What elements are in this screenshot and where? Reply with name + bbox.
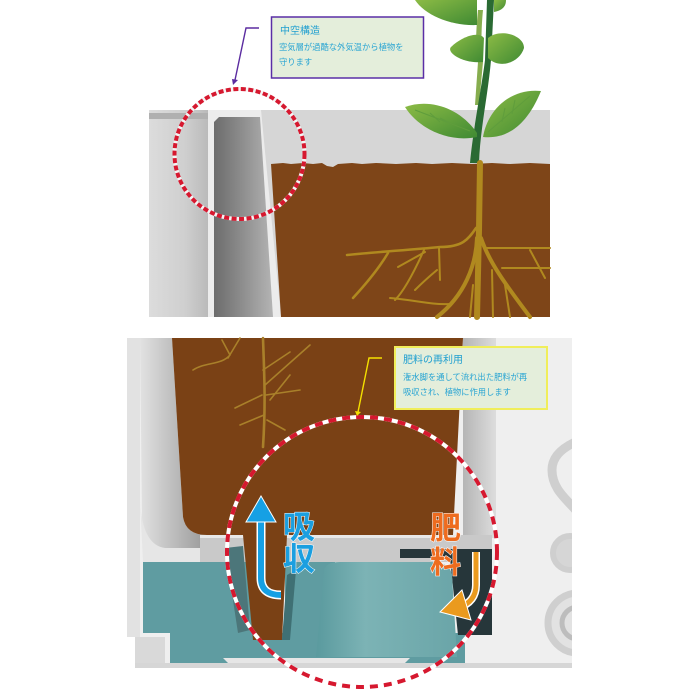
arrow: absorption up [246,496,281,595]
dashed highlight circle [227,417,497,687]
dark reservoir corner [400,549,492,635]
panel: fertilizer reuse cross-section [127,338,608,687]
arrow: to fertilizer reuse [355,358,382,416]
dashed highlight circle [174,89,304,219]
soil body [172,338,463,640]
label: fertilizer: 肥 [430,511,461,546]
panel: hollow structure cross-section [149,0,550,317]
callout: hollow structure: 守ります [279,57,312,67]
callout: hollow structure: 空気層が過酷な外気温から植物を [279,42,403,52]
arrow: fertilizer down [440,552,476,620]
reservoir water [143,546,465,663]
roots [347,163,550,317]
callout: fertilizer reuse: 吸収され、植物に作用します [403,387,511,397]
callout: hollow structure [272,17,424,78]
hollow air cavity [214,117,273,317]
label: absorption: 吸 [283,509,315,545]
water cup [316,562,457,657]
label: absorption: 収 [283,541,315,577]
planter body [127,338,572,668]
callout: fertilizer reuse [395,347,547,409]
upper faint roots [193,338,310,447]
plant leaves and stem [405,0,541,163]
arrow: to hollow structure [232,28,259,85]
label: fertilizer: 料 [430,545,461,580]
soil [271,163,550,317]
planter wall [149,110,550,317]
right side knobs [544,438,572,656]
callout: fertilizer reuse: 潅水脚を通して流れ出た肥料が再 [403,372,527,382]
label: absorption [283,509,315,577]
label: fertilizer [430,511,461,580]
callout: fertilizer reuse: 肥料の再利用 [403,353,463,366]
callout: hollow structure: 中空構造 [280,24,320,37]
